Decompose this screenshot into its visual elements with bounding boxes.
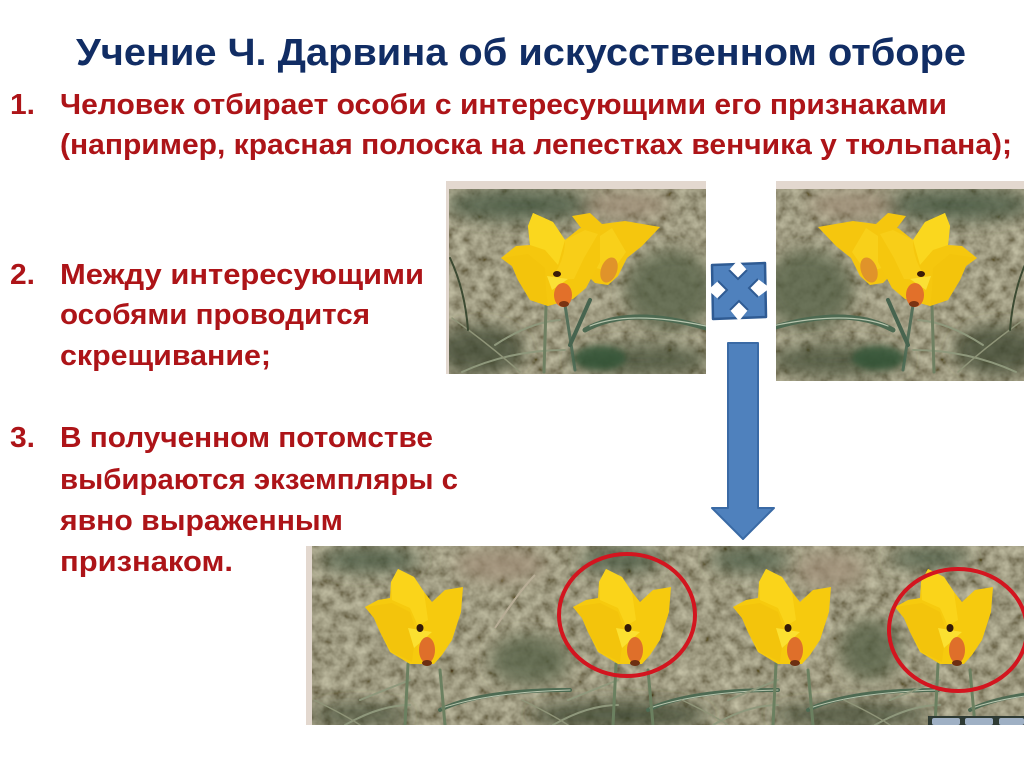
title: Учение Ч. Дарвина об искусственном отборе: [76, 32, 966, 74]
text block: step 3: признаком.: [60, 546, 233, 578]
tulip 3: [733, 569, 831, 666]
text block: step 3: 3.: [10, 422, 35, 454]
tulip 4: [895, 569, 993, 666]
tulip 1: [365, 569, 463, 666]
text block: step 3: выбираются экземпляры с: [60, 464, 458, 496]
icon: crossing four-way arrow: [708, 260, 770, 321]
photo: parent tulip right: [763, 181, 1024, 381]
arrow: down to offspring: [712, 343, 774, 539]
text block: step 1: 1.: [10, 89, 35, 121]
text block: step 2: скрещивание;: [60, 340, 271, 372]
text block: step 1: Человек отбирает особи с интересующими его признаками: [60, 89, 947, 121]
selection circle 1: [559, 554, 695, 676]
text block: step 3: [10, 422, 458, 578]
text block: step 2: Между интересующими: [60, 259, 424, 291]
selection circle 2: [889, 569, 1024, 691]
photo: parent tulip left: [446, 181, 706, 374]
photo: offspring tulips: [306, 546, 1024, 729]
text block: step 2: особями проводится: [60, 299, 370, 331]
toolbar remnant: [928, 716, 1024, 725]
text block: step 3: В полученном потомстве: [60, 422, 433, 454]
tulip 2: [573, 569, 671, 666]
text block: step 2: [10, 259, 424, 372]
text block: step 2: 2.: [10, 259, 35, 291]
text block: step 1: (например, красная полоска на лепестках венчика у тюльпана);: [60, 129, 1012, 161]
text block: step 3: явно выраженным: [59, 505, 343, 537]
text block: step 1: [10, 89, 1012, 161]
